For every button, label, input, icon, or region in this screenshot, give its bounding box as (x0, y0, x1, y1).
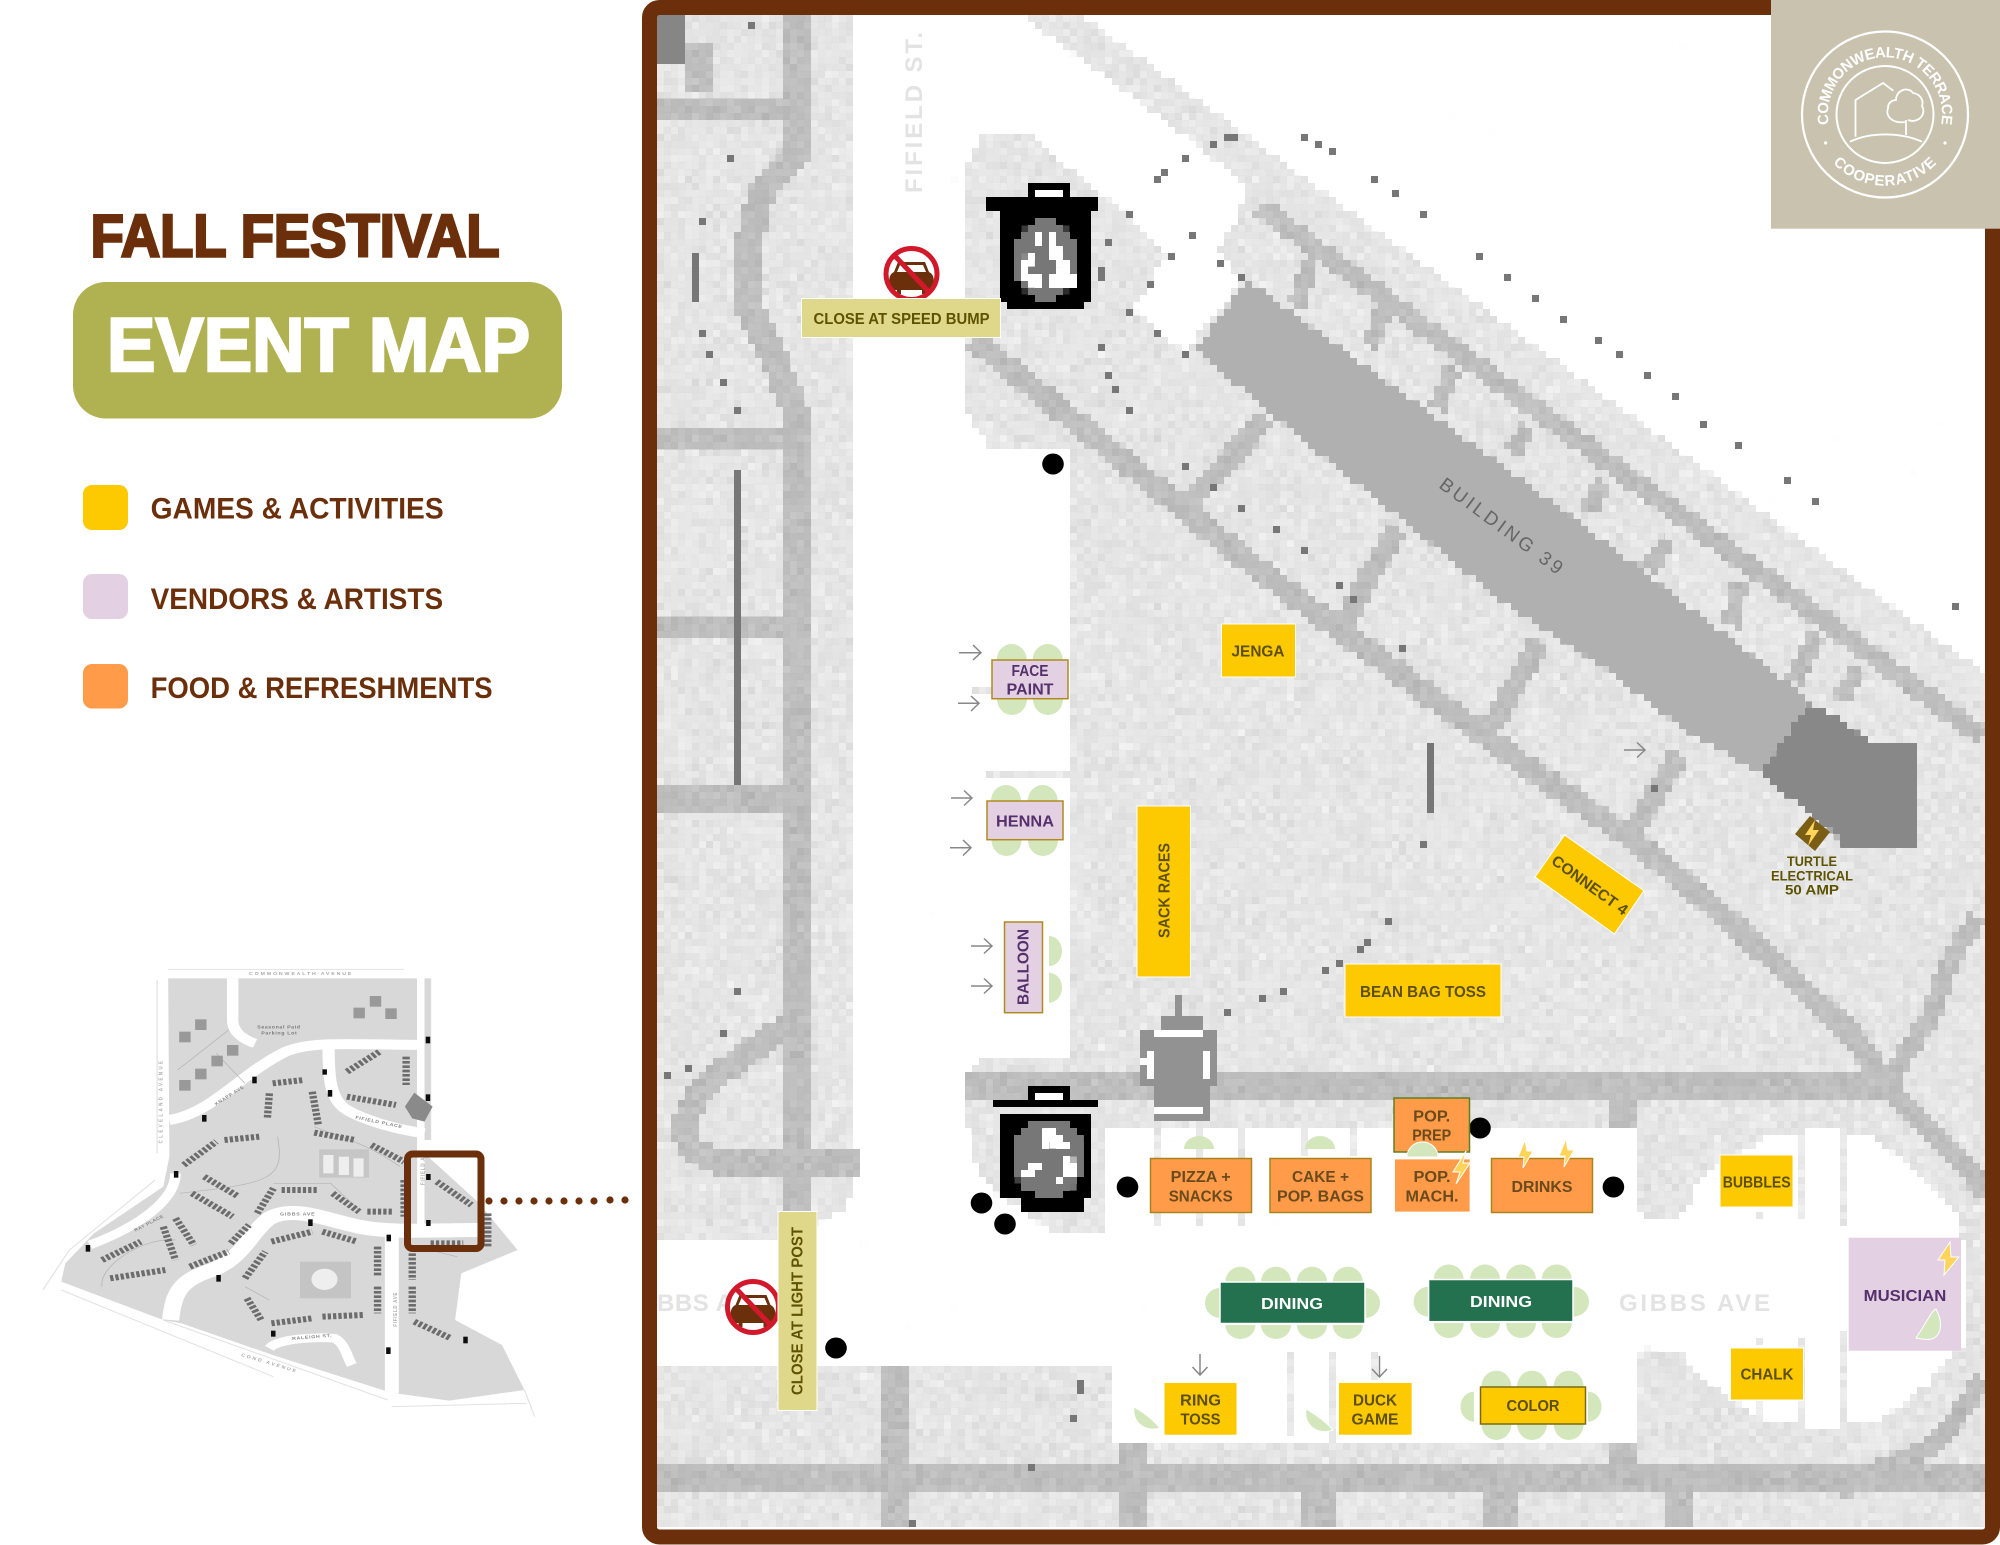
stall: pop machine (1395, 1151, 1470, 1212)
logo: Commonwealth Terrace Cooperative (1800, 30, 1970, 199)
stall: jenga (1222, 624, 1296, 677)
stall: face paint (958, 644, 1068, 715)
overview site map: GIBBS AVE (280, 1212, 316, 1217)
heading pill: Event Map (73, 282, 562, 418)
icon: recycling bin, north (987, 183, 1101, 307)
stall: face paint: FACE (1012, 663, 1048, 680)
stall: drinks (1492, 1139, 1592, 1212)
stall: duck game (1306, 1356, 1412, 1435)
stall: ring toss: RING (1180, 1392, 1221, 1410)
stall: chalk (1730, 1348, 1804, 1400)
stall: pop prep (1394, 1098, 1470, 1157)
legend item: vendors and artists (83, 574, 443, 619)
icon: power bolt (1938, 1242, 1959, 1275)
dining table: east (1414, 1264, 1589, 1338)
icon: power bolts (1518, 1139, 1574, 1168)
overview site map: CLEVELAND AVENUE (158, 1060, 165, 1143)
legend item: food and refreshments (83, 664, 493, 708)
pixelated base map (657, 15, 1990, 1530)
legend (83, 485, 493, 708)
power marker: turtle electrical: TURTLE (1787, 853, 1837, 869)
icon: recycling bin, south (994, 1085, 1101, 1209)
overview site map: COND AVENUE (240, 1353, 298, 1374)
stall: cake and pop bags (1270, 1136, 1371, 1212)
dining table: east: DINING (1470, 1294, 1532, 1311)
overview site map: FIFIELD AVE (393, 1292, 399, 1327)
stall: drinks: DRINKS (1512, 1179, 1572, 1196)
overview site map: COMMONWEALTH AVENUE (249, 971, 353, 977)
stall: henna: HENNA (996, 814, 1054, 830)
callout: close at speed bump (802, 298, 1000, 338)
legend item: games and activities: GAMES & ACTIVITIES (151, 493, 444, 526)
road closure: speed bump (802, 248, 1000, 338)
stall: cake and pop bags: CAKE + (1292, 1169, 1349, 1186)
black barrier dots (825, 454, 1624, 1358)
stall: connect 4: CONNECT 4 (1548, 852, 1631, 919)
stall: color: COLOR (1506, 1398, 1560, 1415)
stall: bubbles: BUBBLES (1723, 1174, 1791, 1192)
icon: fire hydrant (1139, 997, 1216, 1122)
icon: no cars (886, 248, 937, 300)
logo: Commonwealth Terrace Cooperative: COOPERATIVE (1835, 156, 1936, 186)
stall: pizza and snacks (1150, 1136, 1252, 1212)
overview site map: RAY PLACE (133, 1214, 166, 1233)
building 39 end section (1760, 703, 1914, 850)
stage: musician (1849, 1238, 1966, 1351)
legend item: food and refreshments: FOOD & REFRESHMENTS (151, 672, 493, 705)
stall: cake and pop bags: POP. BAGS (1277, 1188, 1364, 1206)
street label: Gibbs Ave left fragment: BBS A (657, 1290, 733, 1317)
stall: balloon: BALLOON (1016, 929, 1032, 1005)
stall: chalk: CHALK (1740, 1366, 1794, 1384)
overview site map: FIFIELD PLACE (355, 1115, 404, 1130)
logo: Commonwealth Terrace Cooperative: COMMONWEALTH TERRACE (1818, 46, 1952, 125)
overview site map: Seasonal Paid (257, 1025, 301, 1030)
stall: ring toss (1134, 1354, 1236, 1435)
overview site map: FIFIELD A (420, 1157, 427, 1185)
heading pill: Event Map: EVENT MAP (107, 303, 530, 388)
stall: sack races: SACK RACES (1156, 843, 1174, 938)
stall: pizza and snacks: SNACKS (1169, 1188, 1233, 1206)
overview site map: RALEIGH ST. (292, 1333, 333, 1342)
street label: Fifield St.: FIFIELD ST. (901, 32, 928, 193)
stall: bubbles (1720, 1155, 1793, 1207)
legend item: vendors and artists: VENDORS & ARTISTS (151, 583, 443, 616)
logo panel (1771, 0, 2000, 229)
stall: duck game: GAME (1352, 1412, 1398, 1428)
stage: musician: MUSICIAN (1864, 1288, 1946, 1305)
legend item: games and activities (83, 485, 444, 530)
stall: balloon (971, 922, 1062, 1013)
icon: no cars (728, 1282, 778, 1332)
overview site map (43, 969, 535, 1417)
arrow near building (1624, 742, 1645, 758)
power marker: turtle electrical: ELECTRICAL (1771, 868, 1853, 884)
stall: pop prep: PREP (1412, 1128, 1451, 1144)
stall: pop prep: POP. (1413, 1108, 1450, 1126)
pixelated map features (657, 15, 1959, 1530)
overview site map: Parking Lot (261, 1031, 298, 1036)
power marker: turtle electrical (1771, 816, 1853, 898)
stall: henna (950, 785, 1063, 856)
building 39 roof (1195, 280, 1810, 773)
stall: ring toss: TOSS (1180, 1412, 1220, 1428)
dotted leader line (485, 1196, 629, 1205)
callout: close at light post: CLOSE AT LIGHT POST (790, 1226, 806, 1395)
stall: pop machine: POP. (1414, 1169, 1450, 1186)
building label: BUILDING 39 (1435, 474, 1566, 579)
stall: duck game: DUCK (1353, 1392, 1398, 1410)
stall: color (1460, 1371, 1602, 1440)
stall: connect 4 (1535, 835, 1644, 934)
stall: bean bag toss (1345, 964, 1501, 1017)
stall: sack races (1137, 806, 1190, 977)
callout: close at light post (778, 1212, 817, 1410)
icon: power bolt (1453, 1151, 1470, 1184)
road closure: light post (728, 1212, 817, 1410)
street label: Gibbs Ave: GIBBS AVE (1619, 1290, 1770, 1317)
map frame (650, 8, 1992, 1537)
power marker: turtle electrical: 50 AMP (1785, 882, 1839, 898)
callout: close at speed bump: CLOSE AT SPEED BUMP (814, 311, 990, 328)
stall: bean bag toss: BEAN BAG TOSS (1360, 984, 1486, 1001)
stall: pop machine: MACH. (1406, 1188, 1458, 1206)
overview site map: KNAPP AVE (214, 1084, 247, 1107)
dining table: west: DINING (1261, 1296, 1323, 1313)
stall: jenga: JENGA (1232, 644, 1284, 660)
locator box on overview map (408, 1154, 481, 1248)
title: Fall Festival: FALL FESTIVAL (91, 202, 500, 270)
stall: pizza and snacks: PIZZA + (1171, 1169, 1231, 1186)
dining table: west (1205, 1267, 1380, 1339)
icon: seating wedge (1916, 1309, 1941, 1339)
stall: face paint: PAINT (1006, 682, 1054, 698)
